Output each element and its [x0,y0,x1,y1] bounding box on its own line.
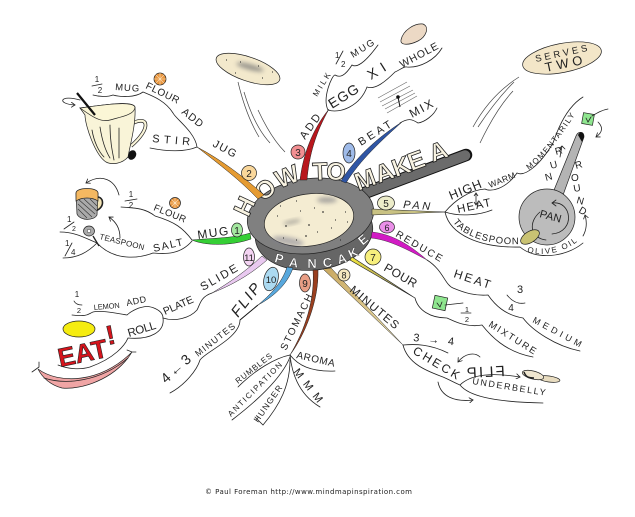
title: how to make a: A [371,157,398,189]
fraction: one half: 1 [129,190,134,199]
fraction: one half: 1 [95,75,100,84]
footer credit: © Paul Foreman http://www.mindmapinspiration.com [205,488,412,496]
label: teaspoon: TEASPOON [99,232,146,252]
icon: egg [401,24,427,44]
label: mug: MUG [349,37,377,61]
label: add: ADD [298,112,324,142]
number 6: 6 [384,223,390,233]
arrow: check box to handle [596,122,602,137]
label: mug: MUG [115,82,139,95]
label: flip mirrored: FLIP [466,363,505,382]
central image: frying pan [228,136,466,277]
label: round: O [571,173,579,184]
branch line: beat [341,122,402,183]
label: round [571,159,588,218]
title: how to make a: M [351,163,380,197]
fraction: one half teaspoon [64,215,76,233]
label: turn: R [554,145,564,158]
label: eat [55,320,118,373]
title: how to make a: W [271,159,304,194]
icon: mug [76,188,103,219]
fraction: three quarters: 3 [517,284,523,296]
icon: orange slice [154,73,166,85]
branch line: mug [192,233,251,244]
title: how to make a [228,136,452,221]
label: lemon: LEMON [93,301,120,312]
number 8: 8 [341,270,347,280]
label: beat: BEAT [356,119,394,149]
icon: music staff [378,82,417,113]
fraction: one half: 1 [465,305,469,314]
double arrow [474,193,478,205]
label: medium: MEDIUM [531,315,583,349]
label: olive oil: OLIVE OIL [528,239,577,254]
label: hunger: HUNGER [251,383,284,424]
icon: round pan: PAN [538,208,563,226]
title: how to make a: O [326,158,346,186]
branch 11: slide, plate, eat [32,248,267,388]
fraction: one half teaspoon: 2 [72,226,76,233]
icon: green check box [582,109,608,125]
fraction: one half: 2 [98,86,103,95]
label: anticipation: ANTICIPATION [226,360,284,418]
number 5 [378,196,394,210]
fraction: one half [461,305,471,324]
number 3: 3 [295,148,301,159]
label: jug: JUG [211,138,238,160]
branch 10: flip [157,266,293,393]
title: pancake on rim: A [288,254,300,271]
label: roll: ROLL [126,320,158,340]
fraction: one half: 2 [77,306,81,315]
branch line: add [300,109,329,180]
branch 5: pan, heat, oil [372,42,608,256]
fraction: one half: 1 [75,290,80,299]
title: pancake on rim: K [346,244,361,262]
callout: serves two: TWO [544,52,584,75]
label: 3 to 4: 3 → 4 [413,332,455,348]
title: pancake on rim: N [307,256,317,271]
fraction: one half [335,51,346,69]
label: stomach: STOMACH [279,293,315,352]
fraction: three quarters [507,284,525,314]
label: minutes: MINUTES [347,284,401,332]
title: pancake on rim: E [355,231,372,248]
label: mug: MUG [196,224,229,242]
number 8 [338,269,350,281]
label: round: D [576,205,588,218]
label: check: CHECK [410,344,462,382]
icon: lemon [63,321,95,337]
branch 4: beat, mix [341,82,437,183]
number 5: 5 [383,199,389,210]
branch 8: minutes, check, flip [323,268,560,403]
branch 2: jug, stir, add flour [63,47,285,199]
label: reduce: REDUCE [394,229,444,265]
icon: smile [32,350,136,388]
icon: jug [63,93,146,164]
arrow: under [438,382,473,400]
title: how to make a: E [404,145,429,177]
label: pour: POUR [382,260,420,291]
label: momentarily: MOMENTARILY [526,112,574,170]
label: egg: EGG [325,80,362,112]
pan top [243,171,378,261]
branch 9: stomach [226,270,336,425]
pancake in pan [261,188,357,252]
label: round: U [573,183,582,195]
fraction: one half [92,75,103,95]
icon: orange slice [170,198,180,208]
number 9: 9 [302,279,308,290]
arrow: olive oil to pan [583,215,586,236]
fraction: one half teaspoon: 1 [67,215,72,224]
number 11: 11 [244,253,254,264]
label: eat: EAT [55,333,110,373]
callout: serves two: SERVES [534,43,588,65]
pan underside rim [251,189,377,277]
label: plate: PLATE [161,294,195,318]
label: pan: PAN [403,199,431,213]
fraction: one quarter teaspoon: 1 [65,239,70,248]
number 11 [244,248,254,266]
fraction: one half: 2 [341,60,346,69]
label: flour: FLOUR [152,203,188,226]
label: mmm: MMM [291,366,325,405]
fraction: one half [74,290,82,315]
label: turn: N [544,171,554,184]
label: turn [544,145,565,184]
fraction: one quarter teaspoon: 4 [71,248,76,257]
label: eat: ! [103,320,118,351]
number 7 [365,249,381,265]
fraction: one quarter teaspoon [65,239,76,257]
fraction: one half: 1 [335,51,340,60]
arrow: to teaspoon [109,217,120,238]
title: pancake on rim [273,231,372,271]
label: add: ADD [179,106,206,130]
number 3 [291,145,305,159]
title: pancake on rim: P [273,250,286,267]
branch 7: pour mixture [350,249,538,357]
number 6 [380,221,394,233]
icon: olive oil drop [518,227,542,247]
icon: flying pancake [212,47,284,91]
fraction: three quarters: 4 [508,303,514,314]
arrow: to mug [86,178,119,195]
branch 3: add milk, egg [291,24,442,180]
label: high: HIGH [447,177,484,203]
label: slide: SLIDE [198,263,240,294]
label: salt: SALT [152,236,184,255]
branch line: stomach [290,270,318,355]
label: mixture: MIXTURE [486,319,538,357]
label: heat: HEAT [456,197,492,216]
number 10: 10 [266,275,276,286]
callout: serves two [520,36,604,80]
label: tablespoon: TABLESPOON [454,218,518,244]
label: heat: HEAT [452,267,493,292]
number 1: 1 [234,226,240,237]
label: rumbles: RUMBLES [234,351,274,386]
title: pancake on rim: C [322,254,334,271]
number 7: 7 [370,253,376,264]
fraction: one half: 2 [465,315,469,324]
title: how to make a: T [312,158,328,186]
title: how to make a: A [425,136,452,168]
label: round: R [574,159,584,172]
label: turn: U [549,159,559,172]
branch line: flip [258,267,293,305]
label: underbelly: UNDERBELLY [472,376,546,398]
label: add: ADD [125,294,147,308]
icon: green check box [432,295,463,311]
arrow: flip back [458,354,480,362]
branch line: pour [350,257,415,298]
label: whole: WHOLE [398,40,440,71]
label: warm: WARM [487,170,517,190]
motion lines [238,82,285,152]
branch line: jug [197,147,264,199]
label: flip: FLIP [228,280,265,320]
label: stir: STIR [152,133,191,148]
number 9 [300,274,310,292]
icon: round pan [519,132,584,245]
motion lines [473,77,519,143]
fraction: one half [125,190,137,210]
branch line: pan [372,209,445,215]
label: 4 to 3: 4←3 [157,351,194,386]
icon: teaspoon [84,226,99,246]
label: aroma: AROMA [295,350,336,370]
fraction: one half: 2 [129,201,134,210]
pan handle [362,155,466,194]
branch line: reduce [371,232,427,260]
label: minutes: MINUTES [193,321,237,359]
number 4: 4 [346,149,352,160]
label: round: N [575,195,585,208]
title: how to make a: O [249,173,282,207]
branch line: slide [212,256,267,293]
branch 1: mug, flour, salt [60,178,251,258]
label: milk: MILK [311,71,333,98]
number 2: 2 [246,169,252,180]
number 2 [242,166,256,180]
label: x1: XI [364,59,389,83]
label: mix: MIX [407,97,435,121]
title: how to make a: H [228,192,261,221]
number 1 [232,223,242,237]
icon: side view pancake [521,368,560,384]
branch line: minutes [323,268,403,345]
label: flour: FLOUR [144,81,181,106]
title: how to make a: K [388,151,415,183]
title: pancake on rim: A [335,250,349,267]
branch 6: reduce heat [371,221,583,351]
